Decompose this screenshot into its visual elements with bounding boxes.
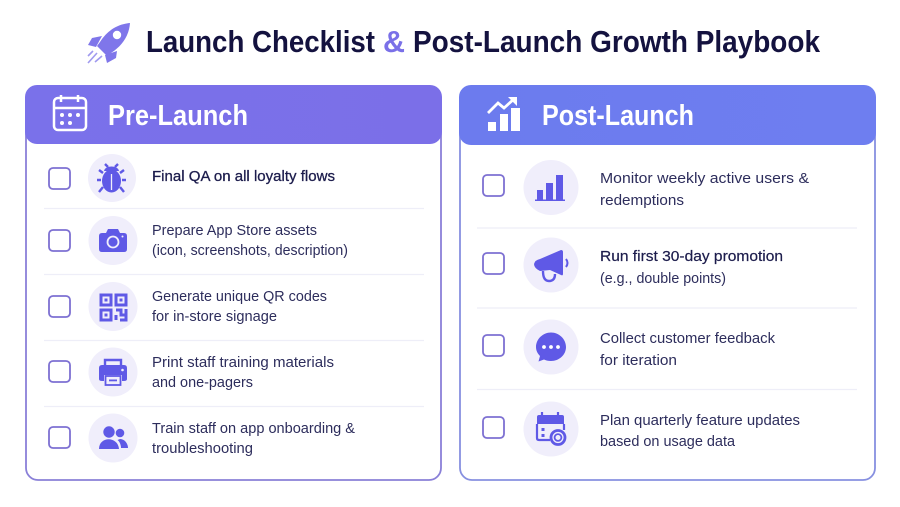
item: monitor users bbox=[483, 160, 809, 215]
icon: calendar refresh bbox=[537, 412, 565, 444]
item: final QA: Final QA on all loyalty flows bbox=[152, 169, 335, 185]
item: QR codes: Generate unique QR codes bbox=[152, 289, 327, 305]
icon: calendar bbox=[54, 95, 86, 130]
item: feedback bbox=[483, 320, 776, 374]
item: promotion: Run first 30-day promotion bbox=[600, 249, 783, 265]
item: monitor users: redemptions bbox=[600, 193, 684, 209]
item: final QA bbox=[49, 154, 335, 202]
icon: people bbox=[99, 426, 128, 449]
icon: camera bbox=[99, 229, 127, 252]
title: & bbox=[383, 24, 405, 59]
item: QR codes bbox=[49, 282, 327, 331]
item: promotion: (e.g., double points) bbox=[600, 271, 726, 287]
panel: post-launch bbox=[459, 85, 876, 480]
item: quarterly updates bbox=[483, 402, 800, 456]
panel header: pre-launch bbox=[25, 85, 442, 144]
item: train staff: Train staff on app onboarding & bbox=[152, 421, 355, 437]
item: training materials: and one-pagers bbox=[152, 375, 253, 391]
title: Launch Checklist bbox=[146, 24, 375, 59]
item: quarterly updates: based on usage data bbox=[600, 434, 736, 450]
item: monitor users: Monitor weekly active users & bbox=[600, 171, 809, 187]
item: app store assets bbox=[49, 216, 348, 265]
icon: bug bbox=[97, 164, 126, 192]
item: app store assets: (icon, screenshots, description) bbox=[152, 243, 348, 259]
item: app store assets: Prepare App Store assets bbox=[152, 223, 317, 239]
icon: bar chart bbox=[535, 175, 565, 201]
heading: Post-Launch: Post-Launch bbox=[542, 100, 694, 132]
item: train staff bbox=[49, 414, 355, 462]
panel: pre-launch bbox=[25, 85, 442, 480]
icon: QR code bbox=[101, 295, 126, 320]
panel header: post-launch bbox=[459, 85, 876, 145]
title bbox=[146, 24, 821, 59]
icon: printer bbox=[99, 360, 127, 385]
heading: Pre-Launch: Pre-Launch bbox=[108, 100, 248, 132]
item: training materials bbox=[49, 348, 334, 396]
title: Post-Launch Growth Playbook bbox=[413, 24, 821, 59]
icon: growth chart bbox=[488, 97, 520, 131]
item: quarterly updates: Plan quarterly feature updates bbox=[600, 413, 800, 429]
icon: speech bubble bbox=[536, 332, 566, 362]
item: promotion bbox=[483, 238, 783, 292]
item: feedback: for iteration bbox=[600, 353, 677, 369]
icon: rocket bbox=[88, 23, 130, 63]
item: QR codes: for in-store signage bbox=[152, 309, 277, 325]
item: train staff: troubleshooting bbox=[152, 441, 253, 457]
item: training materials: Print staff training materials bbox=[152, 355, 334, 371]
item: feedback: Collect customer feedback bbox=[600, 331, 776, 347]
icon: megaphone bbox=[534, 250, 568, 281]
